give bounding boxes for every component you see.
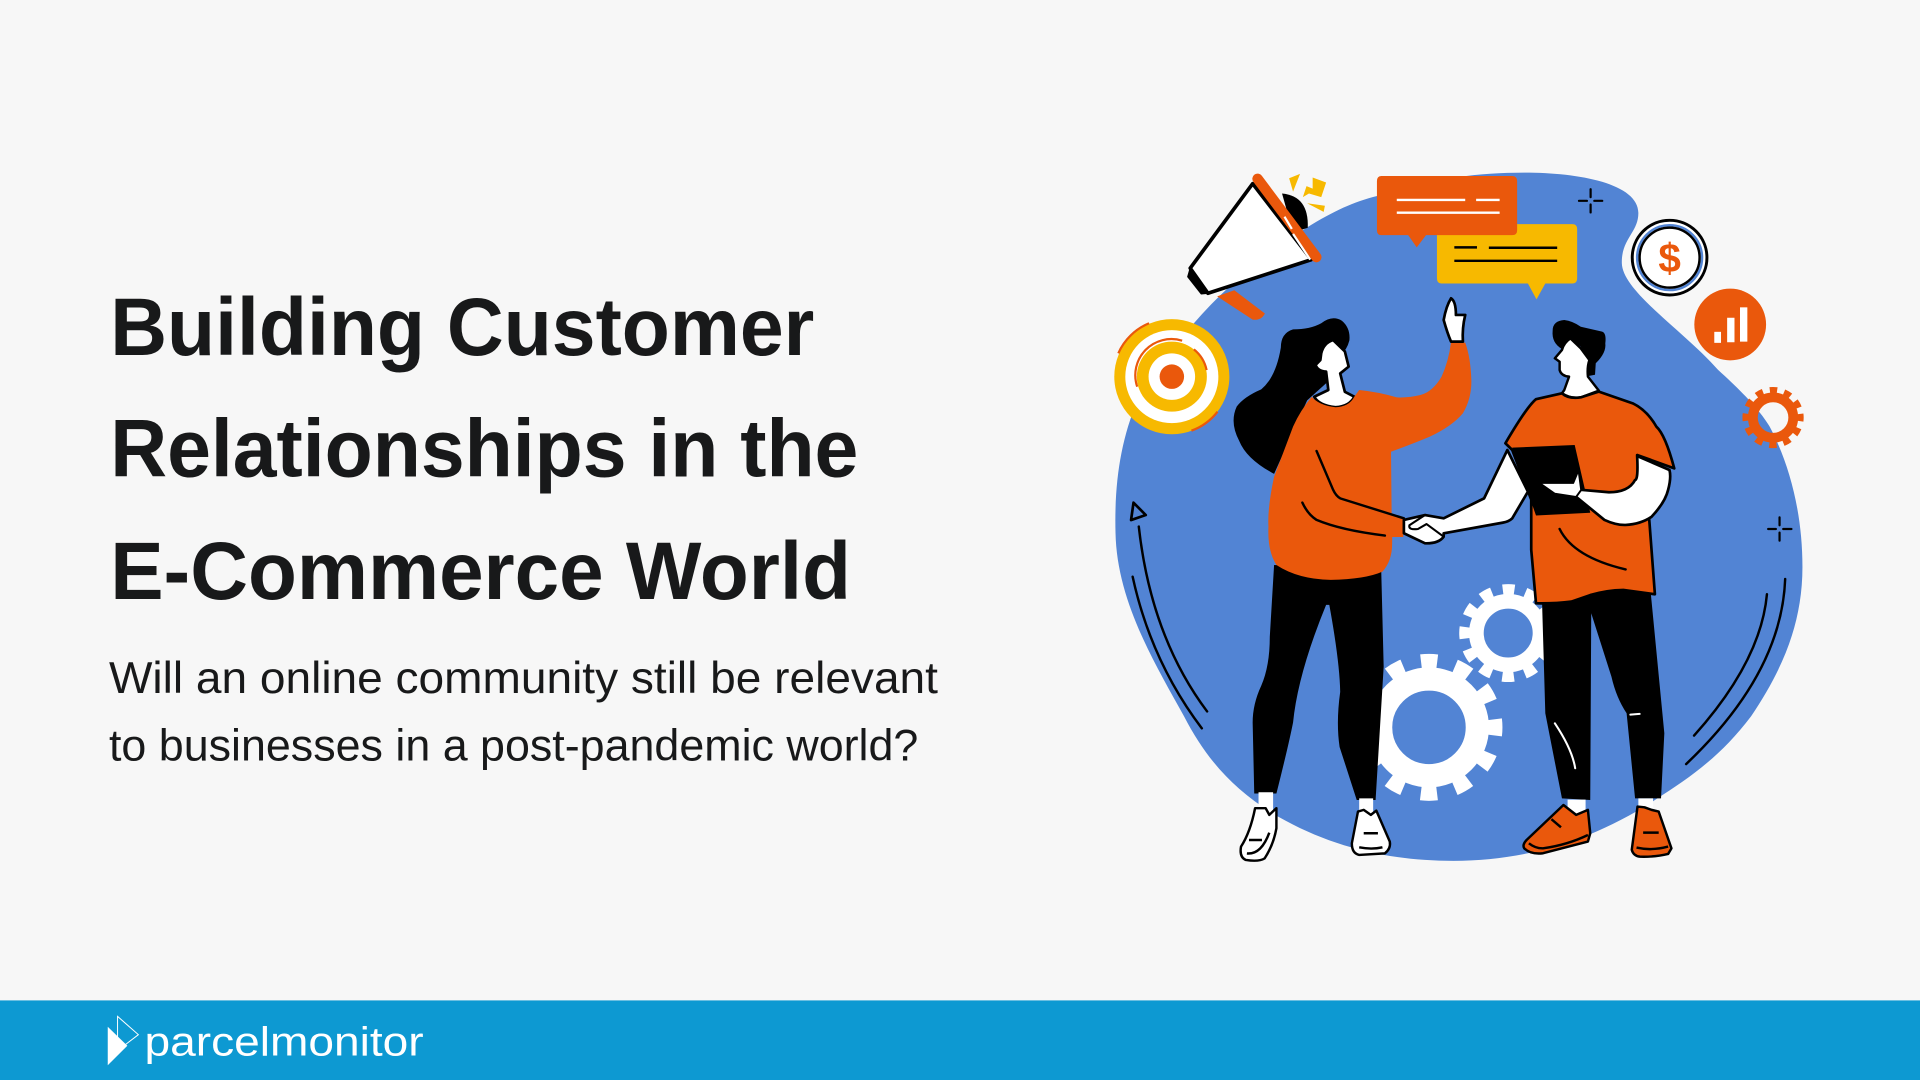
woman right shoe xyxy=(1352,810,1390,855)
blue background blob xyxy=(1115,173,1802,861)
man shirt fold xyxy=(1560,529,1626,569)
figure: woman xyxy=(1234,298,1471,861)
handshake detail lines xyxy=(1409,515,1444,537)
man ankles xyxy=(1568,798,1653,816)
woman sweater xyxy=(1268,343,1471,580)
icon: bar chart badge xyxy=(1694,289,1766,360)
man hair xyxy=(1553,320,1606,377)
motion lines right xyxy=(1686,579,1785,764)
subtitle: Will an online community still be relevant xyxy=(109,654,938,703)
subtitle: to businesses in a post-pandemic world? xyxy=(109,721,918,770)
man hand on tablet xyxy=(1540,471,1581,497)
logo wordmark: parcelmonitor xyxy=(144,1019,424,1065)
icon: dollar coin: $ xyxy=(1658,235,1681,281)
decorative sparkle top xyxy=(1579,189,1602,212)
motion lines left xyxy=(1133,527,1207,728)
icon: small white gear xyxy=(1459,584,1557,682)
icon: megaphone xyxy=(1188,174,1326,320)
man right shoe xyxy=(1632,807,1671,857)
man right arm and handshake xyxy=(1404,450,1528,543)
man left shoe xyxy=(1524,805,1590,853)
icon: dollar coin xyxy=(1632,220,1707,295)
man tablet xyxy=(1512,445,1590,516)
icon: large white gear xyxy=(1357,655,1501,800)
man left arm xyxy=(1576,456,1670,525)
woman left shoe xyxy=(1241,808,1276,861)
title xyxy=(110,282,858,617)
title: Relationships in the xyxy=(110,403,858,494)
man legs xyxy=(1542,588,1664,800)
logo mark xyxy=(108,1016,138,1065)
woman legs xyxy=(1253,565,1384,800)
woman ankles xyxy=(1259,792,1373,814)
title: Building Customer xyxy=(110,282,814,373)
icon: orange gear xyxy=(1742,387,1804,449)
subtitle xyxy=(109,654,938,770)
figure: man xyxy=(1404,320,1674,857)
speech bubble: yellow xyxy=(1437,224,1577,299)
speech bubble: orange xyxy=(1377,176,1517,247)
footer bar xyxy=(0,1000,1920,1080)
woman face and neck xyxy=(1314,340,1354,407)
decorative triangle xyxy=(1131,503,1146,520)
illustration: customer relationship handshake xyxy=(1114,173,1804,861)
man leg highlights xyxy=(1555,714,1640,768)
woman hair xyxy=(1234,318,1350,474)
man shirt xyxy=(1505,392,1674,603)
logo: parcelmonitor xyxy=(108,1016,424,1065)
icon: target xyxy=(1114,319,1229,434)
man face and neck xyxy=(1555,338,1599,398)
decorative sparkle right xyxy=(1768,517,1791,541)
woman sweater folds xyxy=(1302,451,1404,536)
woman raised hand xyxy=(1444,298,1465,342)
title: E-Commerce World xyxy=(110,526,851,617)
